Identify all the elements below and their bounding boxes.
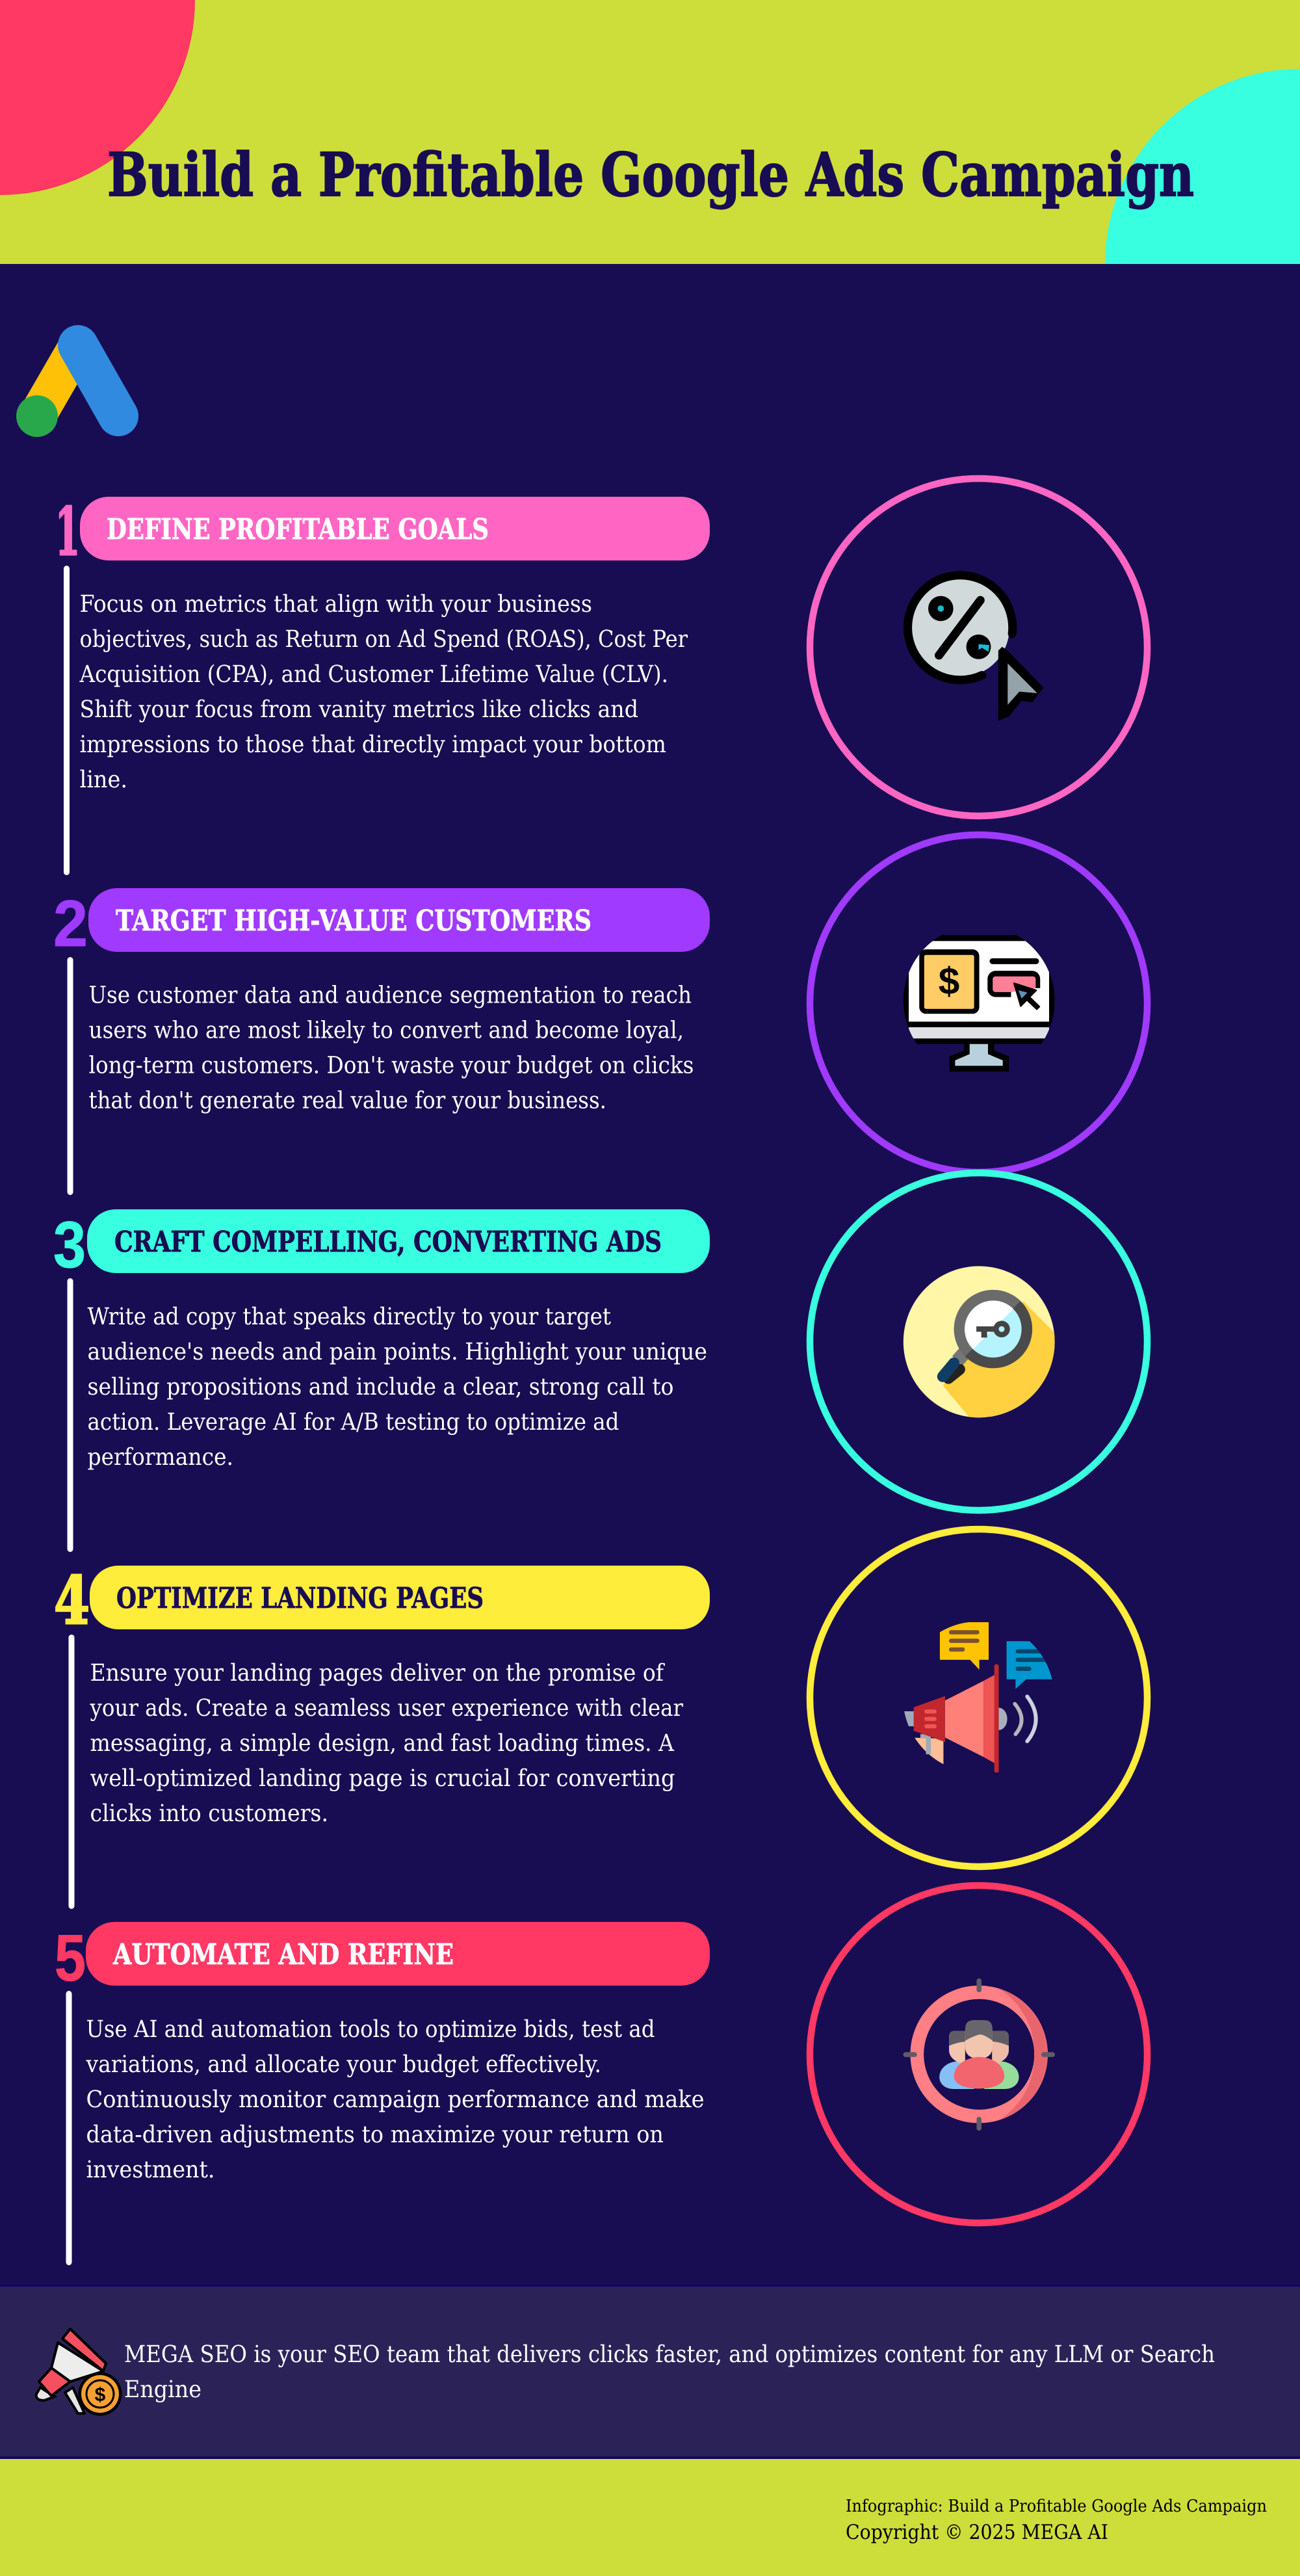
footer caption: Infographic: Build a Profitable Google Ads Campaign	[846, 2497, 1267, 2516]
icon: audience target	[905, 1981, 1052, 2128]
step 3 text: action. Leverage AI for A/B testing to optimize ad	[87, 1409, 619, 1436]
step 4 text: clicks into customers.	[90, 1800, 328, 1827]
step 3 text: audience's needs and pain points. Highlight your unique	[87, 1339, 707, 1365]
step 5 text	[86, 2016, 705, 2183]
step 4 text: your ads. Create a seamless user experience with clear	[90, 1695, 684, 1722]
panel: step 1	[55, 493, 710, 875]
step 4 text	[90, 1660, 684, 1827]
ring: step 2	[810, 835, 1147, 1172]
step 3 text	[87, 1304, 707, 1471]
step 5 text: Continuously monitor campaign performance and make	[86, 2086, 705, 2113]
panel: step 5	[55, 1922, 710, 2265]
step 2 text: that don't generate real value for your business.	[88, 1087, 606, 1114]
icon: magnifier with key	[904, 1266, 1055, 1417]
icon: megaphone with speech bubbles	[904, 1622, 1056, 1772]
panel: footer	[0, 2459, 1300, 2576]
ring: step 5	[810, 1886, 1147, 2223]
step 4 text: Ensure your landing pages deliver on the promise of	[90, 1660, 665, 1687]
step 3 text: performance.	[87, 1444, 233, 1471]
panel: step 3	[53, 1209, 710, 1552]
panel: promo band	[0, 2284, 1300, 2459]
step 2 heading pill: TARGET HIGH-VALUE CUSTOMERS	[116, 904, 592, 938]
step 1 text: impressions to those that directly impact your bottom	[79, 731, 666, 758]
promo text: Engine	[124, 2376, 202, 2403]
ring: step 4	[810, 1529, 1147, 1867]
step 1 vertical bar	[64, 566, 70, 875]
panel: step 2	[53, 887, 710, 1195]
step 5 heading pill: AUTOMATE AND REFINE	[112, 1938, 454, 1971]
step 5 number: 5	[55, 1922, 86, 1995]
step 2 text: users who are most likely to convert and become loyal,	[88, 1017, 684, 1044]
step 1 text: Shift your focus from vanity metrics like clicks and	[79, 696, 638, 723]
step 1 number: 1	[55, 493, 80, 570]
promo text: MEGA SEO is your SEO team that delivers clicks faster, and optimizes content for any LLM or Search	[124, 2341, 1215, 2368]
ring: step 3	[810, 1173, 1147, 1510]
step 2 heading pill	[88, 888, 710, 952]
ring: step 1	[810, 479, 1147, 816]
step 5 heading pill	[86, 1922, 710, 1986]
step 3 text: Write ad copy that speaks directly to your target	[87, 1304, 611, 1330]
step 1 text: objectives, such as Return on Ad Spend (ROAS), Cost Per	[79, 626, 688, 653]
icon: monitor with price card	[903, 935, 1055, 1071]
step 4 vertical bar	[69, 1635, 74, 1909]
step 1 text: Acquisition (CPA), and Customer Lifetime Value (CLV).	[79, 661, 668, 688]
step 3 number: 3	[53, 1209, 86, 1281]
step 2 vertical bar	[68, 957, 73, 1195]
copyright: Copyright © 2025 MEGA AI	[846, 2521, 1108, 2544]
step 1 text	[79, 591, 688, 793]
step 1 heading pill: DEFINE PROFITABLE GOALS	[107, 513, 489, 546]
step 3 heading pill	[87, 1209, 710, 1273]
step 4 text: messaging, a simple design, and fast loading times. A	[90, 1730, 675, 1757]
step 2 text: Use customer data and audience segmentation to reach	[88, 982, 692, 1009]
icon: monitor with price card: $	[939, 960, 959, 1003]
step 5 text: variations, and allocate your budget effectively.	[86, 2051, 601, 2078]
step 5 vertical bar	[66, 1991, 72, 2265]
promo text	[124, 2341, 1215, 2403]
step 1 heading pill	[80, 497, 710, 560]
step 4 heading pill: OPTIMIZE LANDING PAGES	[116, 1582, 484, 1615]
panel: step 4	[54, 1562, 710, 1909]
step 3 text: selling propositions and include a clear, strong call to	[87, 1374, 673, 1400]
step 5 text: investment.	[86, 2157, 214, 2183]
step 3 vertical bar	[68, 1278, 73, 1552]
step 5 text: Use AI and automation tools to optimize bids, test ad	[86, 2016, 655, 2043]
step 4 heading pill	[90, 1566, 710, 1629]
step 1 text: line.	[79, 767, 127, 793]
icon: megaphone with coin	[36, 2329, 122, 2416]
step 2 text: long-term customers. Don't waste your budget on clicks	[88, 1052, 694, 1079]
header banner	[0, 0, 1300, 264]
step 5 text: data-driven adjustments to maximize your return on	[86, 2122, 664, 2148]
step 4 text: well-optimized landing page is crucial for converting	[90, 1765, 675, 1792]
step 1 text: Focus on metrics that align with your business	[79, 591, 592, 618]
icon: megaphone with coin: $	[95, 2384, 106, 2406]
step 2 text	[88, 982, 694, 1114]
icon: Google Ads logo	[16, 345, 118, 437]
step 2 number: 2	[53, 887, 88, 960]
step 3 heading pill: CRAFT COMPELLING, CONVERTING ADS	[114, 1226, 662, 1259]
step 4 number: 4	[54, 1562, 90, 1639]
icon: percent badge with cursor	[908, 575, 1043, 720]
